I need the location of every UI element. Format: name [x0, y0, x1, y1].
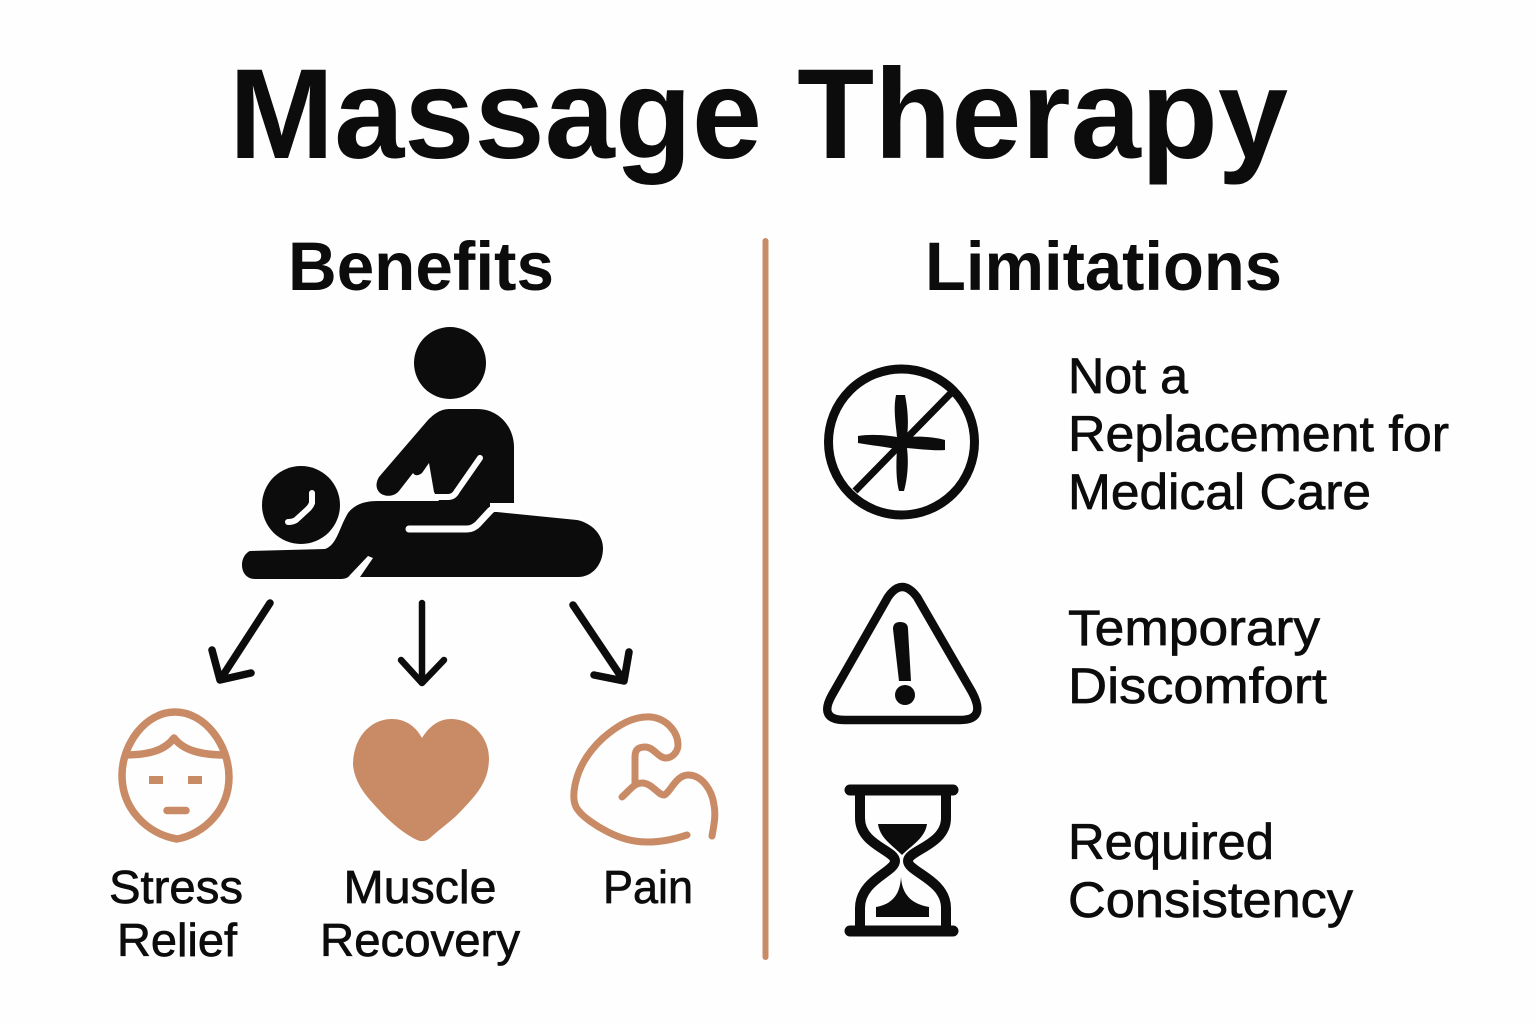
icon: heart	[353, 719, 489, 841]
label: stress relief: Relief	[117, 914, 237, 966]
label: stress relief	[109, 861, 243, 966]
text: not a replacement for medical care: Medical Care	[1068, 464, 1371, 520]
label: pain: Pain	[603, 861, 693, 913]
text: temporary discomfort: Discomfort	[1068, 658, 1327, 714]
icon: warning triangle	[827, 587, 977, 720]
icon: face	[122, 712, 229, 839]
title: Massage Therapy	[229, 43, 1288, 186]
arrow: to pain	[573, 605, 629, 681]
heading: limitations: Limitations	[925, 228, 1282, 305]
text: temporary discomfort: Temporary	[1068, 600, 1320, 656]
panel: limitations	[827, 228, 1449, 931]
arrow: to muscle recovery	[401, 603, 444, 683]
label: stress relief: Stress	[109, 861, 243, 913]
text: required consistency: Consistency	[1068, 872, 1353, 928]
text: required consistency	[1068, 814, 1353, 928]
center divider	[762, 241, 768, 957]
heading: benefits: Benefits	[288, 228, 554, 305]
arrow: to stress relief	[212, 603, 270, 680]
label: muscle recovery: Recovery	[320, 914, 520, 966]
text: not a replacement for medical care	[1068, 348, 1449, 520]
icon: hourglass	[850, 790, 953, 931]
label: muscle recovery: Muscle	[344, 861, 496, 913]
label: muscle recovery	[320, 861, 520, 966]
text: not a replacement for medical care: Replacement for	[1068, 406, 1449, 462]
icon: flexed arm	[574, 717, 715, 842]
icon: not a medical cross	[828, 369, 974, 515]
text: not a replacement for medical care: Not a	[1068, 348, 1188, 404]
icon: massage scene	[242, 327, 603, 579]
text: required consistency: Required	[1068, 814, 1274, 870]
panel: benefits	[109, 228, 715, 966]
text: temporary discomfort	[1068, 600, 1327, 714]
